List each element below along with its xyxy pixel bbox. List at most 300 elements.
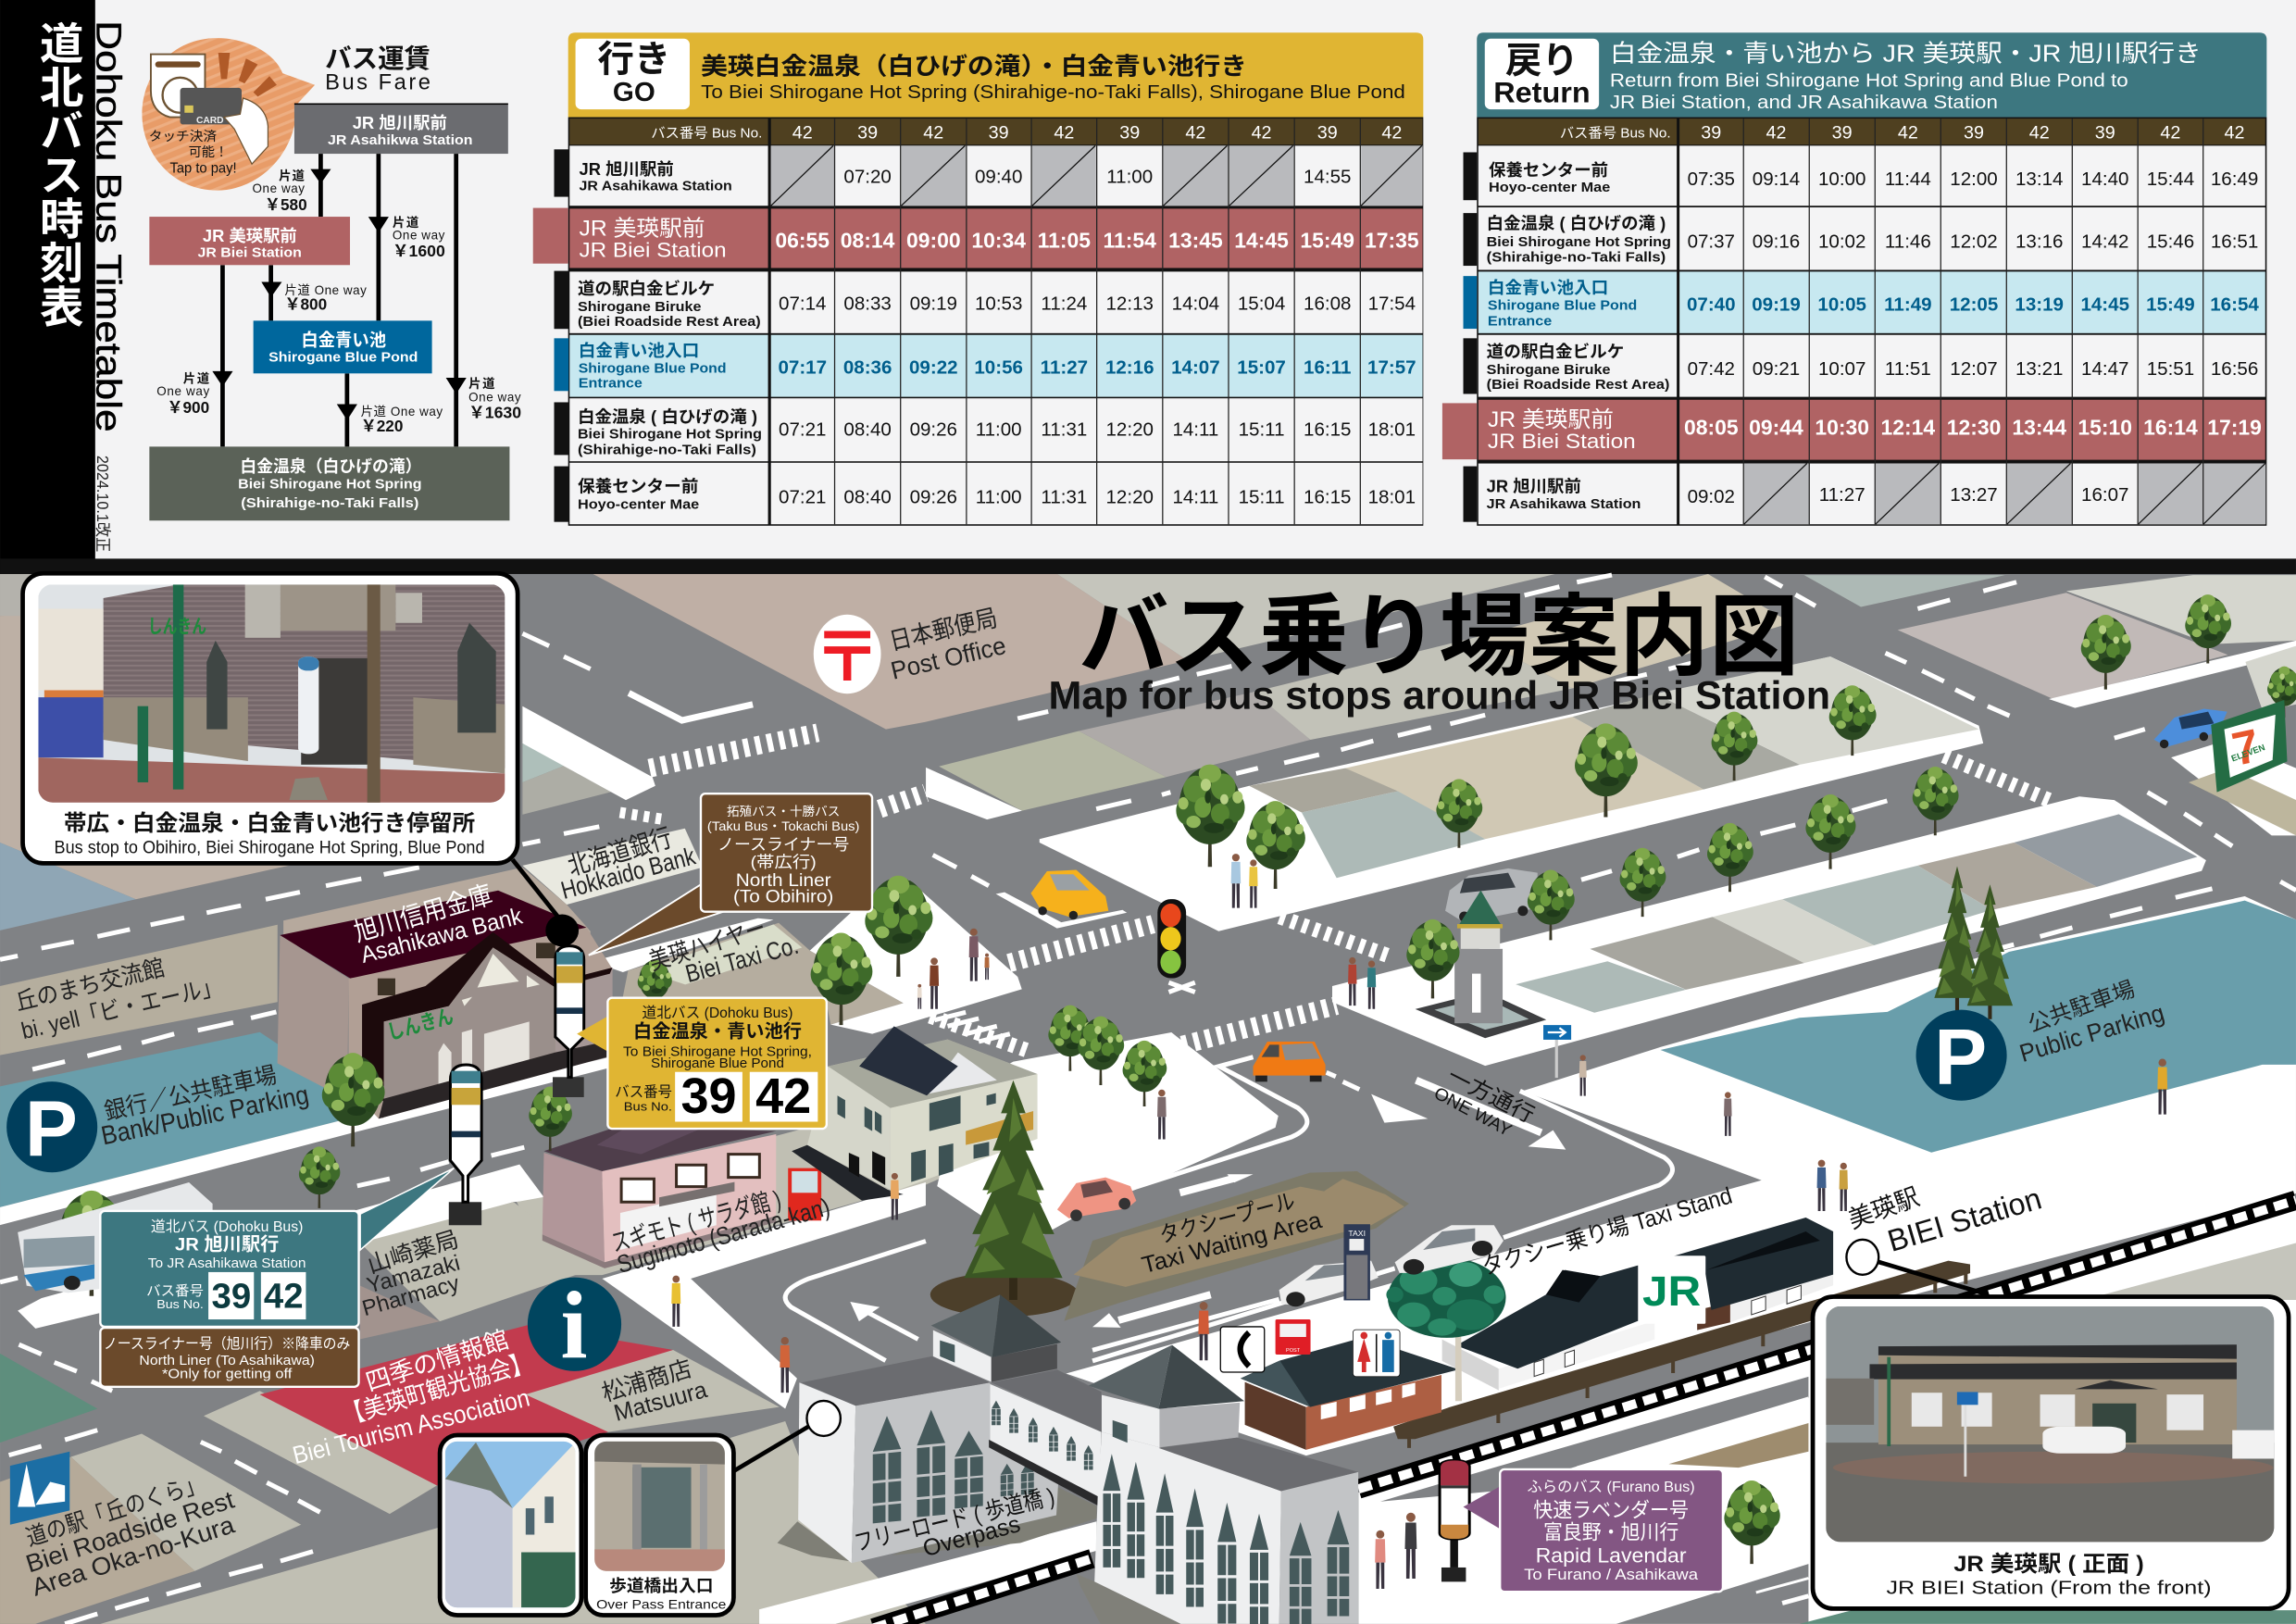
panel: return timetable — [1442, 32, 2266, 526]
left hall — [798, 1356, 1058, 1563]
map: overpass ground — [759, 1488, 1180, 1624]
row: Blue Pond entrance: 09:19 — [1752, 294, 1801, 315]
row: Hot Spring: 09:16 — [1753, 231, 1800, 252]
row: JR Biei: 10:34 — [971, 228, 1026, 252]
arrow: eastbound lane — [1179, 1174, 1254, 1193]
bus number row: 39 — [989, 122, 1009, 143]
poles and signs — [6, 615, 2287, 1581]
row: Shirogane Biruke: 11:24 — [1041, 294, 1087, 315]
row: JR Biei: 12:30 — [1947, 416, 2001, 440]
station box: Blue Pond — [254, 320, 432, 373]
label: Hokkaido Bank: Hokkaido Bank — [558, 842, 699, 905]
row: Hot Spring: 14:42 — [2081, 231, 2128, 252]
row: Shirogane Biruke: 16:56 — [2211, 358, 2258, 380]
bus number row: 39 — [1701, 122, 1721, 143]
row: Hoyo-center: 15:11 — [1239, 486, 1285, 507]
background panel — [0, 0, 2296, 574]
row: Blue Pond entrance: 白金青い池入口 — [579, 342, 699, 360]
station box: Asahikawa: JR 旭川駅前 — [353, 114, 447, 132]
fare labels: ￥1630 — [468, 404, 521, 422]
taxi sign — [1343, 1224, 1370, 1300]
icon: seven eleven: 7 — [2227, 718, 2264, 776]
icon: roadside station — [10, 1452, 69, 1525]
row: Blue Pond entrance: 12:16 — [1105, 356, 1154, 378]
leader lines — [513, 859, 1983, 1471]
label: Biei Taxi: 美瑛ハイヤー — [646, 914, 769, 976]
callout: Dohoku bus to Shirogane: Shirogane Blue Pond — [651, 1056, 784, 1071]
row: JR Biei: 16:14 — [2143, 416, 2198, 440]
row: Hot Spring: 18:01 — [1368, 419, 1416, 441]
callout: bus stop photo: Bus stop to Obihiro, Biei Shirogane Hot Spring, Blue Pond — [55, 838, 485, 857]
row: Hoyo-center: 08:40 — [843, 486, 892, 507]
callout: North Liner to Obihiro: 拓殖バス・十勝バス — [727, 804, 840, 818]
row: Hoyo-center: 07:35 — [1688, 169, 1735, 190]
icon: seven eleven: ELEVEN — [2230, 743, 2266, 764]
building: Sugimoto Sarada-kan — [543, 1127, 821, 1268]
outbound header: 美瑛白金温泉（白ひげの滝）・白金青い池行き — [701, 53, 1247, 81]
row: Blue Pond entrance: 07:40 — [1687, 294, 1736, 315]
row: Blue Pond entrance — [1479, 271, 2265, 333]
photo: overpass entrance: Over Pass Entrance — [596, 1597, 727, 1612]
side tabs — [533, 149, 568, 522]
road sign — [1543, 1025, 1571, 1078]
tree: teal station tree — [1386, 1256, 1506, 1401]
label: roadside station: Biei Roadside Rest — [22, 1485, 238, 1578]
label: overpass: Overpass — [920, 1511, 1023, 1562]
outbound header: 行き — [597, 39, 670, 80]
row: Hot Spring: 12:20 — [1106, 419, 1154, 441]
label: bi.yell: bi. yell「ビ・エール」 — [19, 973, 224, 1044]
label: Yamazaki Pharmacy: Yamazaki — [365, 1251, 463, 1298]
row: Hoyo-center: 09:26 — [910, 486, 957, 507]
map: left-lower parcels — [0, 1032, 926, 1624]
row: Hot Spring: (Shirahige-no-Taki Falls) — [578, 442, 756, 457]
icon: parking right — [1916, 1010, 2007, 1101]
bus number row: 42 — [1054, 122, 1074, 143]
label: roadside station — [22, 1470, 238, 1602]
heading: bus fare — [325, 44, 430, 94]
row: Shirogane Biruke: (Biei Roadside Rest Area) — [578, 314, 761, 330]
fare arrows — [212, 154, 467, 446]
return header — [1477, 32, 2266, 118]
row: JR Biei: 13:44 — [2012, 416, 2066, 440]
row: Hot Spring: Biei Shirogane Hot Spring — [1487, 234, 1671, 250]
callout: Dohoku bus to Shirogane: バス番号 — [615, 1084, 672, 1101]
return header: 白金温泉・青い池から JR 美瑛駅・JR 旭川駅行き — [1610, 39, 2202, 67]
heading: bus fare: バス運賃 — [325, 44, 430, 74]
row: Blue Pond entrance: 16:54 — [2210, 294, 2259, 315]
label: taxi waiting area: タクシープール — [1157, 1189, 1298, 1248]
bus number row: 42 — [1898, 122, 1918, 143]
row: Shirogane Biruke — [1479, 335, 2265, 397]
map: public parking lot right — [1661, 901, 2296, 1153]
photo: bank bus stop: しんきん — [148, 616, 206, 637]
callout: Dohoku bus to Shirogane: 42 — [755, 1068, 811, 1124]
callout: JR Biei station photo: JR BIEI Station (From the front) — [1886, 1578, 2212, 1599]
row: Hoyo-center: 11:00 — [976, 486, 1022, 507]
row: Blue Pond entrance: 15:07 — [1237, 356, 1286, 378]
fare labels: ￥900 — [167, 398, 209, 417]
map: plaza around station — [1066, 896, 2296, 1455]
station box: Asahikawa: JR Asahikwa Station — [328, 132, 473, 148]
callout: North Liner to Obihiro: (帯広行) — [751, 853, 817, 871]
arrow: westbound lane — [1092, 1294, 1211, 1328]
row: JR Asahikawa: 07:20 — [843, 167, 892, 188]
callout: JR Biei station photo — [1813, 1297, 2289, 1608]
row: Blue Pond entrance: 12:05 — [1950, 294, 1998, 315]
label: Matsuura: Matsuura — [611, 1377, 711, 1427]
callout: Dohoku bus to Asahikawa: バス番号 — [146, 1283, 204, 1299]
row: Shirogane Biruke: 道の駅白金ビルケ — [1487, 342, 1624, 361]
label: post office: 日本郵便局 — [887, 604, 1000, 656]
row: JR Biei: 12:14 — [1881, 416, 1935, 440]
label: Asahikawa Bank: Asahikawa Bank — [358, 903, 525, 968]
row: JR Asahikawa — [1479, 464, 2265, 524]
bus stop pole: bank — [553, 946, 584, 1097]
map: right-upper parcels — [926, 574, 2296, 1066]
fare labels: 片道 One way — [284, 283, 367, 297]
label: bi.yell: 丘のまち交流館 — [13, 956, 167, 1016]
row: Shirogane Biruke: 15:04 — [1238, 294, 1285, 315]
icon: tap to pay bubble — [142, 38, 315, 191]
row: Shirogane Biruke: 09:21 — [1753, 358, 1800, 380]
row: JR Asahikawa — [569, 145, 1423, 206]
row: Hot Spring: 11:00 — [976, 419, 1022, 441]
row: Hot Spring: Biei Shirogane Hot Spring — [578, 426, 762, 442]
row: Blue Pond entrance: 13:19 — [2015, 294, 2064, 315]
fare labels: One way — [253, 181, 305, 195]
row: JR Biei: 15:49 — [1300, 228, 1354, 252]
row: JR Biei: 15:10 — [2078, 416, 2132, 440]
row: JR Asahikawa: JR 旭川駅前 — [1487, 477, 1581, 495]
car: orange — [1254, 1042, 1326, 1081]
row: JR Biei: 17:19 — [2207, 416, 2262, 440]
row: Hoyo-center: 11:31 — [1041, 486, 1087, 507]
row: Hoyo-center: 10:00 — [1818, 169, 1866, 190]
row: Hot Spring: 07:37 — [1688, 231, 1735, 252]
row: Hot Spring: (Shirahige-no-Taki Falls) — [1487, 249, 1666, 265]
callout: JR Biei station photo: JR 美瑛駅 ( 正面 ) — [1953, 1552, 2144, 1577]
icon: parking left — [6, 1081, 97, 1173]
fare labels: ￥800 — [284, 295, 327, 314]
fare labels: 片道 One way — [361, 405, 443, 418]
station box: Hot Spring: Biei Shirogane Hot Spring — [238, 476, 422, 492]
icon: mailbox — [1276, 1319, 1311, 1355]
row: Hot Spring: 白金温泉 ( 白ひげの滝 ) — [1487, 215, 1666, 233]
row: Hoyo-center — [1479, 145, 2265, 206]
station box: Blue Pond: 白金青い池 — [301, 330, 386, 350]
map title: Map for bus stops around JR Biei Station — [1048, 673, 1830, 718]
trees — [56, 594, 2296, 1564]
label: bank parking: 銀行／公共駐車場 — [102, 1062, 279, 1125]
map: post office parcel — [593, 574, 1188, 730]
label: tourism association: 四季の情報館 — [362, 1326, 512, 1396]
station box: Blue Pond: Shirogane Blue Pond — [268, 350, 418, 366]
row: Blue Pond entrance: Entrance — [579, 375, 643, 391]
row: Shirogane Biruke: 12:07 — [1950, 358, 1998, 380]
row: JR Biei: JR 美瑛駅前 — [1488, 407, 1614, 432]
fare labels: 片道 — [279, 169, 306, 183]
icon: information: i — [561, 1271, 588, 1379]
callout: North Liner to Obihiro — [589, 793, 872, 956]
row: JR Biei: JR 美瑛駅前 — [580, 217, 705, 242]
callout: North Liner to Obihiro: (Taku Bus・Tokachi Bus) — [707, 819, 859, 833]
label: Yamazaki Pharmacy: 山崎薬局 — [365, 1227, 462, 1279]
row: JR Biei: 08:05 — [1684, 416, 1739, 440]
icon: mailbox: POST — [1286, 1348, 1301, 1354]
icon: post office: 〒 — [813, 618, 881, 695]
callout: Dohoku bus to Asahikawa: Bus No. — [156, 1298, 204, 1311]
photo: overpass entrance — [586, 1435, 733, 1616]
label: tourism association: 【美瑛町観光協会】 — [340, 1348, 535, 1430]
row: JR Biei: JR Biei Station — [1488, 430, 1636, 453]
row: Hot Spring: 15:11 — [1239, 419, 1285, 441]
car: blue — [2154, 708, 2227, 748]
row: JR Asahikawa: 11:27 — [1819, 484, 1866, 506]
row: JR Biei: 11:05 — [1038, 228, 1091, 252]
label: Matsuura — [599, 1355, 711, 1427]
row: Shirogane Biruke: (Biei Roadside Rest Area) — [1487, 377, 1669, 393]
row: Blue Pond entrance: 14:45 — [2080, 294, 2129, 315]
row: Blue Pond entrance: 17:57 — [1367, 356, 1416, 378]
label: Sugimoto: Sugimoto (Sarada-kan) — [614, 1193, 833, 1279]
row: Blue Pond entrance: 08:36 — [843, 356, 892, 378]
row: JR Biei: 17:35 — [1365, 228, 1419, 252]
row: Hoyo-center: 18:01 — [1368, 486, 1416, 507]
icon: restrooms — [1353, 1330, 1400, 1377]
fare labels: ￥580 — [265, 195, 307, 214]
rail track — [873, 1200, 2296, 1624]
row: Hot Spring: 11:46 — [1885, 231, 1931, 252]
bus number row: 39 — [1119, 122, 1140, 143]
row: Hot Spring: 11:31 — [1041, 419, 1087, 441]
row: JR Asahikawa: 09:02 — [1688, 486, 1735, 507]
return header: 戻り — [1505, 41, 1578, 81]
row: JR Biei: 11:54 — [1104, 228, 1156, 252]
row: Shirogane Biruke: 道の駅白金ビルケ — [578, 279, 715, 298]
callout: Dohoku bus to Shirogane: Bus No. — [624, 1101, 672, 1114]
row: JR Biei: 09:44 — [1749, 416, 1803, 440]
icon: JR logo: JR — [1642, 1267, 1701, 1315]
row: Shirogane Biruke: Shirogane Biruke — [578, 299, 701, 315]
label: post office: Post Office — [888, 631, 1008, 685]
icon: tap to pay bubble: 可能！ — [189, 144, 228, 160]
row: Hot Spring: 15:46 — [2147, 231, 2194, 252]
building: brick toilet — [1241, 1338, 1459, 1450]
callout: North Liner to Obihiro: ノースライナー号 — [718, 835, 849, 854]
heading: bus fare: Bus Fare — [325, 70, 430, 94]
callout: Furano bus: 富良野・旭川行 — [1543, 1520, 1678, 1543]
station box: Hot Spring: (Shirahige-no-Taki Falls) — [241, 495, 418, 511]
callout: bus stop photo: 帯広・白金温泉・白金青い池行き停留所 — [64, 811, 476, 836]
taxi waiting area — [1064, 1171, 1409, 1321]
bus number row: 42 — [1381, 122, 1402, 143]
row: Shirogane Biruke: 07:14 — [779, 294, 826, 315]
map title: バス乗り場案内図 — [1079, 588, 1799, 687]
label: taxi waiting area: Taxi Waiting Area — [1140, 1207, 1325, 1279]
vending machine — [788, 1168, 821, 1220]
bus number row — [1479, 119, 2265, 144]
arrow: road direction — [850, 1302, 918, 1339]
row: Hoyo-center: Hoyo-center Mae — [578, 496, 699, 512]
North Liner note — [100, 1328, 359, 1387]
row: Shirogane Biruke: 12:13 — [1106, 294, 1154, 315]
table frame — [1477, 118, 2266, 526]
return header: Return — [1493, 76, 1591, 109]
callout: Dohoku bus to Asahikawa: 道北バス (Dohoku Bus) — [151, 1218, 303, 1235]
row: Hot Spring: 16:51 — [2211, 231, 2258, 252]
row: Hot Spring: 09:26 — [910, 419, 957, 441]
row: Hot Spring: 14:11 — [1172, 419, 1218, 441]
platform roof — [1393, 1261, 1970, 1439]
row: JR Biei: JR Biei Station — [580, 239, 727, 262]
row: Hot Spring — [1479, 207, 2265, 269]
row: JR Asahikawa: 13:27 — [1950, 484, 1998, 506]
fare labels: 片道 — [468, 376, 495, 391]
icon: tap to pay bubble: Tap to pay! — [169, 161, 237, 177]
bus number row: 39 — [857, 122, 878, 143]
taxi sign: TAXI — [1348, 1229, 1366, 1238]
bus stop pole: Furano — [1440, 1460, 1469, 1581]
row: Hot Spring: 10:02 — [1818, 231, 1866, 252]
return header: JR Biei Station, and JR Asahikawa Station — [1610, 92, 1998, 113]
row: Shirogane Biruke: 16:08 — [1304, 294, 1351, 315]
row: Hoyo-center: 16:15 — [1304, 486, 1351, 507]
bus number row: 42 — [2029, 122, 2050, 143]
photo: station front — [1826, 1306, 2276, 1543]
row: Blue Pond entrance: 14:07 — [1171, 356, 1220, 378]
table frame — [568, 118, 1423, 526]
callout: Dohoku bus to Asahikawa: 39 — [212, 1277, 251, 1316]
label: tourism association: Biei Tourism Association — [290, 1383, 532, 1469]
map: block south of intersection — [937, 1032, 1279, 1244]
icon: tap to pay bubble: CARD — [196, 116, 224, 126]
left black title strip — [0, 0, 2296, 574]
side tabs — [1442, 152, 1477, 522]
label: taxi stand: タクシー乗り場 Taxi Stand — [1479, 1182, 1735, 1280]
fare labels: 片道 — [393, 215, 419, 230]
callout: small photos — [440, 1435, 733, 1616]
row: Hot Spring: 13:16 — [2015, 231, 2063, 252]
row: Hoyo-center: 12:00 — [1950, 169, 1998, 190]
row: Hot Spring: 白金温泉 ( 白ひげの滝 ) — [578, 407, 757, 426]
row: Shirogane Biruke: 08:33 — [843, 294, 892, 315]
callout: Furano bus: Rapid Lavendar — [1536, 1544, 1687, 1568]
outbound header — [568, 32, 1423, 118]
photo: bank bus stop — [38, 584, 505, 803]
bus number row: 39 — [1317, 122, 1338, 143]
callout: Dohoku bus to Asahikawa: 42 — [264, 1277, 304, 1316]
row: Blue Pond entrance: 11:49 — [1884, 294, 1932, 315]
label: Yamazaki Pharmacy: Pharmacy — [359, 1271, 462, 1321]
callout: Furano bus: 快速ラベンダー号 — [1533, 1499, 1689, 1522]
row: Blue Pond entrance: 09:22 — [909, 356, 958, 378]
bus number row: 42 — [1766, 122, 1787, 143]
station box: Hot Spring — [149, 446, 509, 520]
map labels — [13, 604, 2167, 1602]
row: Blue Pond entrance: 07:17 — [778, 356, 827, 378]
row: Hoyo-center: Hoyo-center Mae — [1489, 180, 1610, 195]
row: Hoyo-center: 07:21 — [779, 486, 826, 507]
row: Hoyo-center: 14:40 — [2081, 169, 2128, 190]
station box: Biei: JR Biei Station — [198, 244, 302, 260]
row: Hoyo-center: 16:49 — [2211, 169, 2258, 190]
label: public parking: 公共駐車場 — [2025, 977, 2138, 1037]
row: Shirogane Biruke: 09:19 — [910, 294, 957, 315]
label: Sugimoto: スギモト ( サラダ館 ) — [608, 1185, 784, 1257]
bus — [18, 1182, 213, 1293]
row: Hoyo-center: 13:14 — [2015, 169, 2063, 190]
car: white taxi 1 — [1395, 1225, 1504, 1275]
callout: Dohoku bus to Shirogane: 道北バス (Dohoku Bus) — [643, 1005, 792, 1021]
traffic light — [1157, 899, 1186, 979]
row: JR Biei: 08:14 — [841, 228, 895, 252]
building: overpass — [798, 1294, 1358, 1624]
label: Biei station: BIEI Station — [1884, 1181, 2045, 1259]
callout: bus stop photo — [23, 573, 518, 863]
row: Shirogane Biruke: 15:51 — [2147, 358, 2194, 380]
label: bank logo: しんきん — [385, 1005, 455, 1044]
fare labels: One way — [393, 229, 445, 243]
icon: information — [528, 1271, 621, 1379]
vertical Japanese title: 道北バス時刻表 — [32, 20, 83, 328]
row: Shirogane Biruke: 11:51 — [1885, 358, 1931, 380]
row: Blue Pond entrance — [569, 335, 1423, 397]
row: Shirogane Biruke: 10:07 — [1818, 358, 1866, 380]
icon: tap to pay bubble: タッチ決済 — [149, 129, 217, 144]
fare labels: ￥1600 — [393, 242, 445, 260]
bus number row — [569, 119, 1423, 144]
row: Hoyo-center: 15:44 — [2147, 169, 2194, 190]
callout: Dohoku bus to Shirogane — [577, 998, 827, 1129]
row: Hoyo-center: 14:11 — [1172, 486, 1218, 507]
label: Biei station: 美瑛駅 — [1845, 1182, 1923, 1234]
row: JR Biei — [1479, 400, 2265, 460]
bus number row: 39 — [2095, 122, 2115, 143]
icon: JR logo — [1638, 1255, 1705, 1324]
callout: Furano bus: ふらのバス (Furano Bus) — [1527, 1480, 1695, 1495]
callout: Dohoku bus to Asahikawa — [100, 1168, 454, 1387]
vertical English title: Dohoku Bus Timetable — [88, 20, 127, 432]
row: JR Biei: 14:45 — [1234, 228, 1289, 252]
row: JR Asahikawa: JR Asahikawa Station — [1487, 497, 1641, 512]
photo: tourism association — [440, 1435, 581, 1616]
bus number row: 42 — [1185, 122, 1205, 143]
row: Blue Pond entrance: 11:27 — [1041, 356, 1088, 378]
row: JR Asahikawa: 16:07 — [2081, 484, 2128, 506]
row: Blue Pond entrance: Shirogane Blue Pond — [1488, 298, 1637, 314]
fare labels — [156, 169, 521, 435]
label: Hokkaido Bank: 北海道銀行 — [565, 823, 676, 882]
label: one way: 一方通行 — [1443, 1064, 1538, 1129]
row: JR Biei: 06:55 — [775, 228, 830, 252]
row: Hoyo-center: 09:14 — [1753, 169, 1800, 190]
icon: telephone — [1220, 1327, 1265, 1372]
map: block with Biei Taxi and white pavement — [592, 880, 1039, 1194]
row: Shirogane Biruke: 14:04 — [1172, 294, 1219, 315]
row: Shirogane Biruke: Shirogane Biruke — [1487, 362, 1610, 378]
arrow: one-way direction — [1416, 1081, 1566, 1150]
label: one way: ONE WAY — [1430, 1083, 1515, 1141]
building: Asahikawa Shinkin Bank — [278, 891, 613, 1118]
North Liner note: North Liner (To Asahikawa) — [139, 1353, 315, 1368]
station box: Biei — [149, 217, 350, 265]
icon: parking left: P — [25, 1085, 78, 1173]
station box: Asahikawa — [294, 104, 508, 154]
building: station and platform — [1393, 1261, 1970, 1448]
bus number row: 42 — [2225, 122, 2245, 143]
row: Shirogane Biruke: 13:21 — [2015, 358, 2063, 380]
